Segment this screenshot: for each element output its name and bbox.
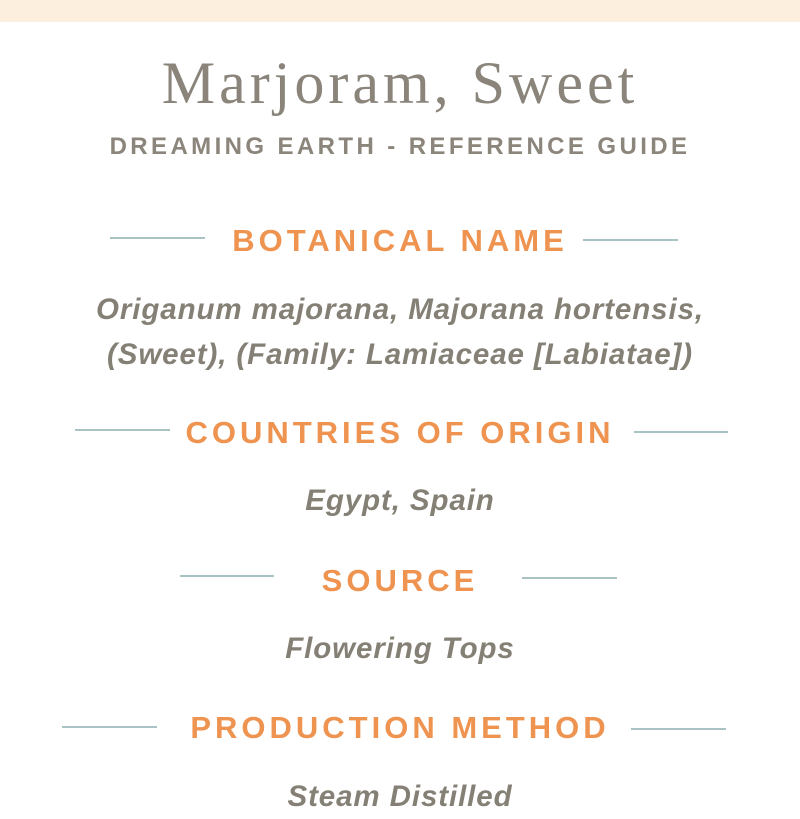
heading: production: PRODUCTION METHOD xyxy=(190,710,610,745)
text: countries: Egypt, Spain xyxy=(305,484,495,517)
subtitle: DREAMING EARTH - REFERENCE GUIDE xyxy=(110,133,690,160)
heading: source: SOURCE xyxy=(322,563,478,598)
text: production: Steam Distilled xyxy=(288,780,512,813)
top band xyxy=(0,0,800,22)
section: source xyxy=(180,563,617,665)
section: production method xyxy=(62,710,726,813)
text: botanical name: Origanum majorana, Majorana hortensis, xyxy=(96,293,704,326)
text: source: Flowering Tops xyxy=(285,632,515,665)
heading: botanical name: BOTANICAL NAME xyxy=(232,223,568,258)
text: botanical name: (Sweet), (Family: Lamiaceae [Labiatae]) xyxy=(107,338,693,371)
section: countries of origin xyxy=(75,415,728,517)
title: Marjoram, Sweet xyxy=(162,50,638,116)
heading: countries: COUNTRIES OF ORIGIN xyxy=(185,415,615,450)
text: botanical name xyxy=(96,293,704,371)
section: botanical name xyxy=(96,223,704,371)
